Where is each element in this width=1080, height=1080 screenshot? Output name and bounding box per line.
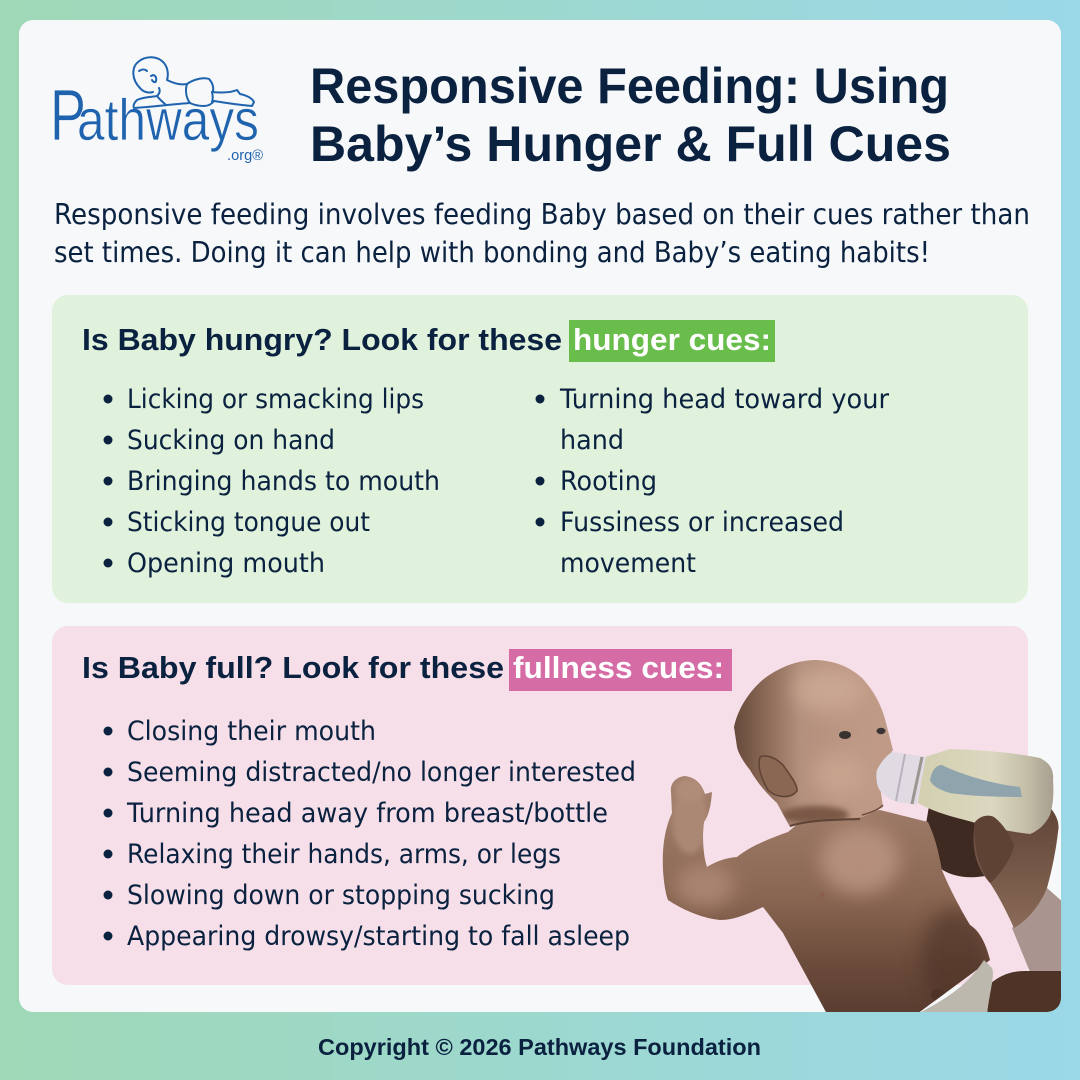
adult arm sleeve: [1012, 888, 1064, 974]
list: hunger cues left: Bringing hands to mouth: [127, 466, 440, 497]
logo wordmark: [50, 76, 259, 156]
footer copyright: Copyright © 2026 Pathways Foundation: [318, 1034, 761, 1060]
icon: baby logo: [133, 57, 254, 108]
adult hand: [973, 800, 1059, 928]
baby body: [663, 776, 990, 1014]
panel: fullness cues: [52, 626, 1028, 985]
list: fullness cues: Appearing drowsy/starting to fall asleep: [127, 921, 630, 952]
heading: hunger cues: [82, 320, 775, 362]
list: fullness cues: [104, 716, 636, 952]
intro text: [54, 198, 1030, 269]
list: hunger cues right: [536, 384, 890, 579]
logo wordmark: athways: [77, 88, 259, 153]
list: hunger cues left: [104, 384, 440, 579]
list: fullness cues: Closing their mouth: [127, 716, 376, 747]
bottle collar: [876, 752, 926, 805]
intro text: set times. Doing it can help with bonding and Baby’s eating habits!: [54, 236, 930, 269]
illustration: baby drinking from a bottle: [663, 660, 1064, 1014]
eyes: [839, 728, 886, 739]
list: hunger cues right: Rooting: [560, 466, 657, 497]
heading: hunger cues: Is Baby hungry? Look for these: [82, 322, 562, 357]
list: hunger cues right: hand: [560, 425, 624, 456]
heading: fullness cues: fullness cues:: [513, 650, 724, 685]
list: hunger cues left: Opening mouth: [127, 548, 325, 579]
list: hunger cues left: Sucking on hand: [127, 425, 335, 456]
head shading: [781, 668, 866, 824]
baby head: [734, 660, 893, 827]
list: hunger cues left: Licking or smacking lips: [127, 384, 424, 415]
panel: hunger cues: [52, 295, 1028, 603]
logo .org: .org®: [227, 147, 263, 164]
title: Baby’s Hunger & Full Cues: [310, 116, 951, 172]
heading: hunger cues: hunger cues:: [573, 322, 771, 357]
nose and cheek: [790, 804, 884, 827]
heading: fullness cues: Is Baby full? Look for these: [82, 650, 504, 685]
title: [310, 58, 951, 172]
list: fullness cues: Slowing down or stopping sucking: [127, 880, 555, 911]
baby far arm: [926, 808, 984, 878]
adult front finger: [975, 816, 1014, 883]
list: fullness cues: Turning head away from breast/bottle: [126, 798, 608, 829]
list: hunger cues right: Turning head toward your: [559, 384, 890, 415]
list: hunger cues right: Fussiness or increased: [560, 507, 844, 538]
bottle body: [918, 749, 1053, 834]
body shading: [672, 778, 989, 1012]
list: fullness cues: Seeming distracted/no longer interested: [127, 757, 636, 788]
bottle: [876, 749, 1053, 834]
logo wordmark: P: [50, 76, 86, 156]
diaper: [917, 960, 993, 1014]
list: hunger cues left: Sticking tongue out: [127, 507, 370, 538]
list: fullness cues: Relaxing their hands, arms, or legs: [127, 839, 561, 870]
title: Responsive Feeding: Using: [310, 58, 949, 114]
bottle straw: [930, 765, 1022, 797]
baby thigh: [987, 971, 1064, 1014]
heading: fullness cues: [82, 649, 732, 691]
ear: [759, 756, 797, 797]
logo: Pathways.org: [50, 57, 263, 164]
list: hunger cues right: movement: [560, 548, 696, 579]
